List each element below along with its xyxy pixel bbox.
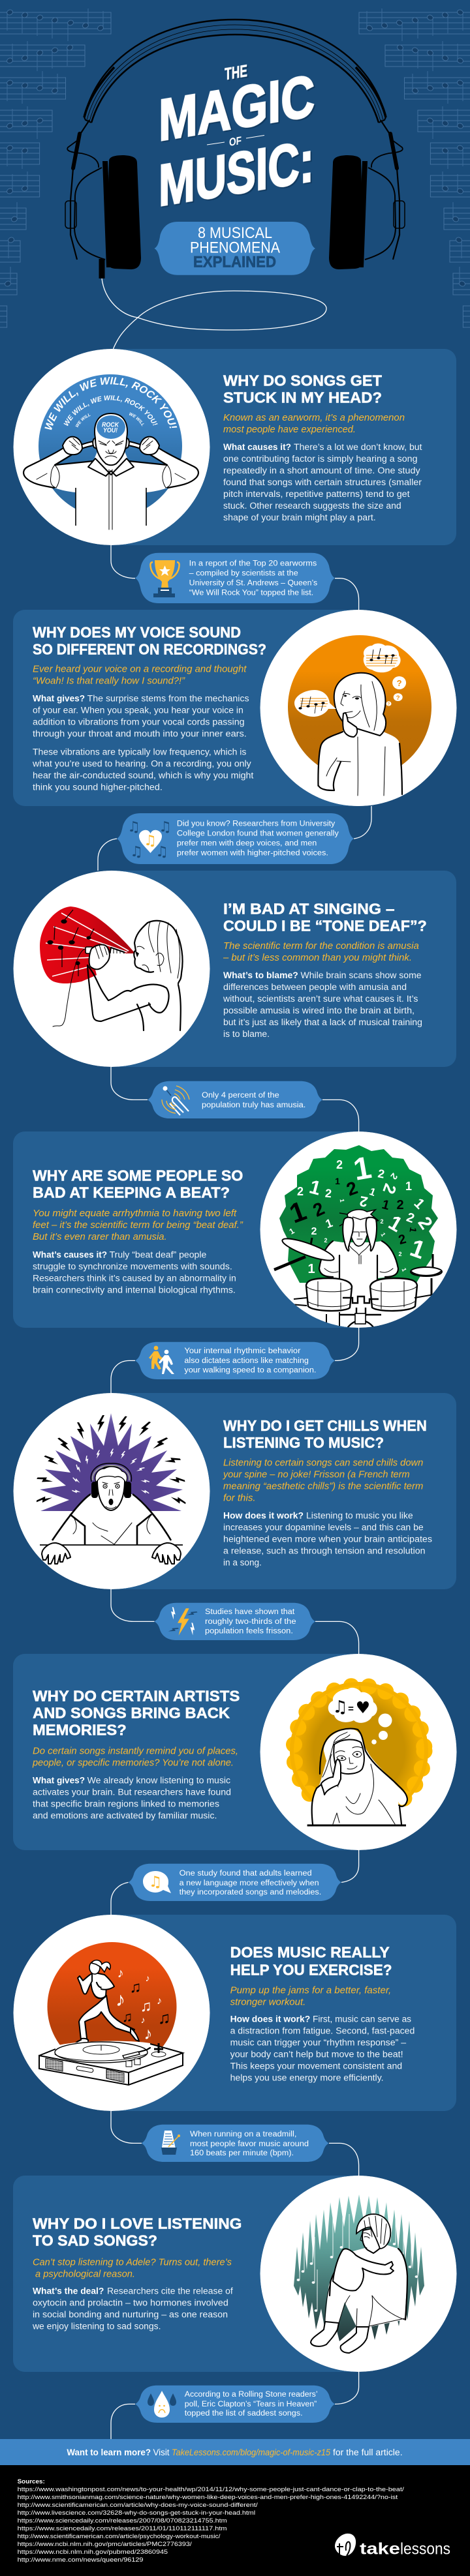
body text: of your ear. When you speak, you hear your voice in <box>33 705 243 715</box>
icon: heart with notes: ♫ <box>144 833 157 849</box>
illustration: woman remembering: = <box>348 1703 354 1715</box>
body text: There’s a lot we don’t know, but <box>294 442 422 452</box>
body text: First, music can serve as <box>313 2014 411 2024</box>
counting numbers: 1 <box>411 1195 428 1212</box>
counting numbers: 2 <box>324 1187 332 1200</box>
callout: language learning fact: they incorporated songs and melodies. <box>180 1889 321 1896</box>
body text: What gives? <box>33 693 85 703</box>
callout: amusia fact: population truly has amusia. <box>202 1101 306 1109</box>
body text: in a song. <box>223 1557 262 1567</box>
panel: stuck in my head <box>13 349 456 545</box>
sources strip: https://www.ncbi.nlm.nih.gov/pubmed/23860945 <box>18 2549 168 2555</box>
intro: But it’s even rarer than amusia. <box>33 1232 167 1242</box>
logo: takelessons: take <box>360 2540 400 2558</box>
intro <box>223 941 419 963</box>
body text: oxytocin and prolactin – two hormones involved <box>33 2298 228 2308</box>
illustration: man plugging his ears: WE WILL, WE WILL, ROCK YOU! <box>44 377 178 430</box>
heading <box>33 624 266 657</box>
counting numbers <box>289 1157 432 1273</box>
illustration: man plugging his ears: WE WILL, WE WILL, ROCK YOU! <box>64 395 158 427</box>
illustration: person singing into microphone <box>13 871 210 1067</box>
intro <box>223 413 405 435</box>
body text <box>32 693 254 792</box>
heading: COULD I BE “TONE DEAF”? <box>223 918 427 935</box>
body text: hear the air-conducted sound, which is why you might <box>33 770 254 780</box>
body text <box>33 1775 231 1820</box>
body text: These vibrations are typically low frequency, which is <box>33 747 247 756</box>
body text <box>223 1510 432 1567</box>
illustration: woman remembering <box>260 1654 457 1850</box>
body text <box>223 970 422 1039</box>
body text: helps you use energy more efficiently. <box>230 2073 384 2082</box>
icon: tuning fork <box>162 1086 189 1115</box>
intro <box>230 1986 391 2008</box>
title: THE <box>225 62 247 84</box>
body text: shape of your brain might play a part. <box>223 513 376 522</box>
body text: What’s causes it? <box>33 1250 107 1259</box>
body text: While brain scans show some <box>300 970 422 980</box>
sources strip: https://www.sciencedaily.com/releases/2007/08/070823214755.htm <box>18 2517 227 2524</box>
counting numbers: 2 <box>388 1171 400 1182</box>
music notes: ♫ <box>140 1998 152 2015</box>
sources strip: http://www.nme.com/news/queen/96129 <box>18 2556 143 2563</box>
callout: treadmill fact <box>142 2125 329 2162</box>
counting numbers: 1 <box>285 1195 310 1229</box>
intro <box>32 1746 238 1768</box>
callout: voice preference fact <box>117 813 354 864</box>
heading <box>223 1417 427 1451</box>
counting numbers: 1 <box>339 1199 345 1203</box>
body text: think you sound higher-pitched. <box>33 782 163 792</box>
panel: sad songs <box>13 2176 457 2372</box>
body text: We already know listening to music <box>87 1775 230 1785</box>
heading: WHY DO I GET CHILLS WHEN <box>223 1417 427 1434</box>
intro: Ever heard your voice on a recording and thought <box>33 665 247 675</box>
connector lines <box>98 545 371 2440</box>
subtitle banner <box>154 222 315 275</box>
icon: trophy <box>150 560 180 597</box>
callout: treadmill fact: When running on a treadmill, <box>190 2131 296 2138</box>
sources strip: https://www.washingtonpost.com/news/to-your-health/wp/2014/11/12/why-some-people-just-cant-dance-or-clap-to-the-beat/ <box>18 2486 404 2493</box>
counting numbers: 1 <box>405 1180 412 1193</box>
counting numbers: 1 <box>324 1216 334 1231</box>
callout: earworm fact <box>135 553 335 603</box>
footer call to action: Visit <box>153 2448 170 2457</box>
headphone cable <box>102 278 326 349</box>
heading: STUCK IN MY HEAD? <box>223 389 382 406</box>
music notes: ♪ <box>144 2024 153 2043</box>
callout: earworm fact: – compiled by scientists at the <box>189 570 298 578</box>
intro: Known as an earworm, it’s a phenomenon <box>223 413 405 423</box>
body text: Researchers think it’s caused by an abnormality in <box>33 1273 236 1283</box>
panel: voice on recordings <box>13 610 457 809</box>
title: OF <box>229 134 242 149</box>
title: MAGIC <box>159 63 315 154</box>
body text: a distraction from fatigue. Second, fast-paced <box>230 2026 415 2035</box>
panel: keeping a beat <box>13 1131 457 1330</box>
icon: heart with notes: ♫ <box>159 819 172 835</box>
intro: Do certain songs instantly remind you of places, <box>33 1746 238 1756</box>
sources strip: https://www.ncbi.nlm.nih.gov/pmc/articles/PMC2776393/ <box>18 2541 192 2547</box>
intro: “Woah! Is that really how I sound?!” <box>33 676 185 687</box>
counting numbers: 1 <box>381 1197 391 1213</box>
counting numbers: 2 <box>379 1181 401 1197</box>
body text: is to blame. <box>223 1029 270 1039</box>
footer call to action: for the full article. <box>333 2448 403 2457</box>
counting numbers: 2 <box>414 1213 437 1233</box>
title: MUSIC: <box>159 128 314 219</box>
body text: activates your brain. But researchers have found <box>33 1787 231 1797</box>
intro: most people have experienced. <box>223 425 356 435</box>
counting numbers: 2 <box>405 1210 416 1226</box>
counting numbers: 1 <box>407 1227 419 1233</box>
callout: frisson fact: Studies have shown that <box>205 1608 295 1616</box>
body text: but it’s just as likely that a lack of musical training <box>223 1017 422 1027</box>
intro: Listening to certain songs can send chills down <box>223 1458 423 1468</box>
heading: DOES MUSIC REALLY <box>230 1944 390 1961</box>
body text: Researchers cite the release of <box>107 2286 233 2296</box>
illustration: woman remembering: ♫ <box>332 1698 348 1717</box>
body text: What causes it? <box>223 442 291 452</box>
sources strip: https://www.sciencedaily.com/releases/2011/01/110112111117.htm <box>18 2525 227 2532</box>
heading: BAD AT KEEPING A BEAT? <box>33 1184 230 1201</box>
icon: speech bubble with note: ♫ <box>149 1874 162 1891</box>
subtitle banner: PHENOMENA <box>190 239 280 256</box>
intro: meaning “aesthetic chills”) is the scientific term <box>223 1481 423 1491</box>
heading: MEMORIES? <box>33 1722 127 1739</box>
body text <box>32 2286 233 2331</box>
illustration: man plugging his ears <box>13 349 210 545</box>
callout: earworm fact: In a report of the Top 20 earworms <box>189 560 317 568</box>
counting numbers: 2 <box>396 1198 404 1212</box>
sources strip: Sources: <box>18 2478 45 2485</box>
subtitle banner: EXPLAINED <box>193 253 276 271</box>
icon: heart with notes <box>127 819 172 860</box>
intro: for this. <box>223 1493 256 1503</box>
callout: language learning fact: One study found that adults learned <box>180 1870 312 1878</box>
footer call to action: TakeLessons.com/blog/magic-of-music-z15 <box>172 2448 330 2457</box>
icon: metronome <box>161 2131 180 2155</box>
counting numbers: 1 <box>351 1150 374 1188</box>
counting numbers: 2 <box>380 1218 384 1225</box>
heading: WHY DOES MY VOICE SOUND <box>33 624 241 641</box>
icon: heart with notes: ♫ <box>155 844 168 860</box>
sources strip: http://www.scientificamerican.com/article/why-does-my-voice-sound-different/ <box>18 2502 258 2508</box>
callout: saddest songs fact: According to a Rolling Stone readers’ <box>185 2391 318 2399</box>
body text: The surprise stems from the mechanics <box>87 693 249 703</box>
body text: music can trigger your “rhythm response” – <box>230 2037 407 2047</box>
body text: possible amusia is wired into the brain at birth, <box>223 1006 415 1015</box>
body text: one contributing factor is simply hearing a song <box>223 454 418 464</box>
heading <box>230 1944 392 1978</box>
heading <box>33 1688 240 1739</box>
body text: What gives? <box>33 1775 85 1785</box>
body text: without, scientists aren’t sure what causes it. It’s <box>223 994 418 1004</box>
callout: rhythm fact <box>135 1342 335 1379</box>
counting numbers: 1 <box>307 1262 315 1276</box>
body text: repeatedly in a short amount of time. One study <box>223 466 420 475</box>
callout: saddest songs fact: topped the list of saddest songs. <box>185 2410 303 2418</box>
counting numbers: 2 <box>398 1251 402 1257</box>
body text: what you’re used to hearing. On a recording, you only <box>32 758 251 768</box>
callout: language learning fact: a new language more effectively when <box>180 1880 319 1887</box>
callout: amusia fact: Only 4 percent of the <box>202 1092 279 1100</box>
heading: LISTENING TO MUSIC? <box>223 1434 384 1451</box>
body text: What’s to blame? <box>223 970 298 980</box>
body text: your body can’t help but move to the beat! <box>230 2049 403 2059</box>
background music staves <box>0 8 470 327</box>
counting numbers: 2 <box>344 1177 360 1200</box>
intro: stronger workout. <box>230 1998 306 2008</box>
illustration: frustrated drummer <box>260 1131 457 1330</box>
logo: takelessons <box>335 2534 450 2558</box>
music notes: ♪ <box>145 1973 150 1983</box>
sources strip: http://www.smithsonianmag.com/science-nature/why-women-like-deep-voices-and-men-prefer-high-ones-41492244/?no-ist <box>18 2494 398 2500</box>
body text: pitch intervals, repetitive patterns) tend to get <box>223 489 410 499</box>
counting numbers: 2 <box>358 1193 369 1210</box>
icon: lightning bolts <box>168 1607 197 1636</box>
counting numbers: 1 <box>288 1226 296 1236</box>
music notes: ♪ <box>118 1966 124 1981</box>
panel: exercise <box>13 1915 456 2111</box>
callout: voice preference fact: College London found that women generally <box>177 830 339 838</box>
callout: treadmill fact: 160 beats per minute (bpm). <box>190 2149 294 2157</box>
illustration: man plugging his ears: WE WILL <box>129 412 144 427</box>
counting numbers: 2 <box>324 1237 328 1244</box>
body text: brain connectivity and internal biological rhythms. <box>33 1285 236 1295</box>
illustration: man plugging his ears: ROCK <box>102 421 119 429</box>
counting numbers: 1 <box>335 1176 340 1186</box>
icon: heart with notes: ♫ <box>130 844 143 860</box>
icon: speech bubble with note <box>143 1871 171 1893</box>
icon: two walkers <box>149 1346 174 1374</box>
title <box>159 62 315 219</box>
intro <box>223 1458 423 1503</box>
intro: – but it’s less common than you might think. <box>223 953 412 963</box>
subtitle banner: 8 MUSICAL <box>198 224 272 242</box>
counting numbers: 1 <box>379 1231 387 1238</box>
music notes: ♪ <box>141 2014 145 2025</box>
body text: and emotions are activated by familiar music. <box>33 1810 217 1820</box>
logo: takelessons: lessons <box>400 2540 450 2558</box>
intro <box>33 2257 232 2279</box>
counting numbers: 2 <box>297 1185 304 1198</box>
callout: treadmill fact: most people favor music around <box>190 2140 309 2148</box>
body text: struggle to synchronize movements with sounds. <box>33 1261 232 1271</box>
callout: voice preference fact: prefer men with deep voices, and men <box>177 840 317 848</box>
music notes: ♪ <box>116 1989 125 2011</box>
intro: people, or specific memories? You’re not alone. <box>32 1758 234 1768</box>
body text: we enjoy listening to sad songs. <box>32 2322 161 2331</box>
body text: How does it work? <box>223 1510 304 1520</box>
counting numbers: 1 <box>384 1210 407 1236</box>
callout: rhythm fact: your walking speed to a companion. <box>184 1366 316 1374</box>
callout: voice preference fact: prefer women with higher-pitched voices. <box>177 850 328 858</box>
heading: WHY DO I LOVE LISTENING <box>33 2215 242 2232</box>
callout: frisson fact: population feels frisson. <box>205 1627 293 1635</box>
counting numbers: 1 <box>400 1267 408 1272</box>
intro: The scientific term for the condition is amusia <box>223 941 419 951</box>
callout: earworm fact: “We Will Rock You” topped the list. <box>189 590 313 597</box>
music notes: ♫ <box>158 2008 170 2028</box>
counting numbers: 2 <box>336 1158 343 1171</box>
callout: language learning fact <box>128 1864 341 1901</box>
intro: feet – it’s the scientific term for being “beat deaf.” <box>33 1220 243 1231</box>
callout: voice preference fact: Did you know? Researchers from University <box>177 820 336 828</box>
callout: saddest songs fact <box>135 2386 335 2423</box>
body text <box>223 442 422 522</box>
heading: WHY ARE SOME PEOPLE SO <box>33 1167 243 1184</box>
illustration: sad listener <box>260 2176 457 2372</box>
illustration: runner on a turntable <box>13 1915 210 2111</box>
heading <box>33 1167 243 1201</box>
illustration: person hearing own voice: ? <box>396 695 400 702</box>
illustration: listener with chills <box>13 1393 210 1589</box>
body text: heightened even more when your brain anticipates <box>223 1534 432 1544</box>
counting numbers: 1 <box>307 1176 323 1200</box>
body text <box>33 1250 236 1295</box>
heading <box>223 901 427 935</box>
footer call to action: Want to learn more? <box>67 2448 151 2457</box>
illustration: man plugging his ears: YOU! <box>103 427 118 434</box>
intro <box>33 665 247 687</box>
body text: a release, such as through tension and resolution <box>223 1546 426 1555</box>
illustration: person hearing own voice: ? <box>397 678 402 688</box>
sources strip <box>0 2465 470 2576</box>
callout: rhythm fact: also dictates actions like matching <box>184 1357 309 1365</box>
callout: saddest songs fact: poll, Eric Clapton’s “Tears in Heaven” <box>185 2401 317 2408</box>
heading: TO SAD SONGS? <box>33 2232 157 2249</box>
icon: sad teardrop <box>148 2391 176 2418</box>
sources strip: http://www.livescience.com/32628-why-do-songs-get-stuck-in-your-head.html <box>18 2509 255 2516</box>
callout: amusia fact <box>148 1081 322 1118</box>
intro: Can’t stop listening to Adele? Turns out, there’s <box>33 2257 232 2268</box>
counting numbers: 2 <box>310 1198 328 1221</box>
heading: WHY DO SONGS GET <box>223 372 382 389</box>
footer call to action <box>0 2439 470 2465</box>
callout: rhythm fact: Your internal rhythmic behavior <box>184 1347 301 1355</box>
headphones <box>65 20 405 278</box>
callout: frisson fact <box>154 1603 315 1640</box>
intro: a psychological reason. <box>35 2269 135 2279</box>
body text: through your throat and mouth into your inner ears. <box>33 728 247 738</box>
illustration: woman remembering: ♥ <box>356 1698 370 1717</box>
body text: increases your dopamine levels – and this can be <box>223 1522 424 1532</box>
body text: found that songs with certain structures (smaller <box>223 477 422 487</box>
intro: You might equate arrhythmia to having two left <box>33 1208 237 1219</box>
body text: addition to vibrations from your vocal cords passing <box>33 717 245 726</box>
body text: stuck. Other research suggests the size and <box>223 501 401 511</box>
music notes: ♫ <box>129 1979 141 1996</box>
illustration: person hearing own voice: ? <box>388 703 390 707</box>
body text: Listening to music you like <box>306 1510 413 1520</box>
music notes: ♪ <box>157 1996 162 2007</box>
heading: SO DIFFERENT ON RECORDINGS? <box>33 640 266 657</box>
body text: What’s the deal? <box>33 2286 104 2296</box>
callout: frisson fact: roughly two-thirds of the <box>205 1618 296 1626</box>
body text: This keeps your movement consistent and <box>230 2061 402 2071</box>
body text <box>230 2014 415 2082</box>
heading: WHY DO CERTAIN ARTISTS <box>33 1688 240 1705</box>
intro: Pump up the jams for a better, faster, <box>230 1986 391 1996</box>
heading: I’M BAD AT SINGING – <box>223 901 395 918</box>
heading <box>33 2215 242 2249</box>
icon: heart with notes: ♫ <box>127 819 140 835</box>
counting numbers: 1 <box>368 1186 377 1199</box>
counting numbers: 1 <box>407 1235 429 1265</box>
body text: differences between people with amusia and <box>223 982 407 992</box>
lightning bolts around the burst <box>37 1415 186 1504</box>
heading: HELP YOU EXERCISE? <box>230 1961 392 1978</box>
sources strip: http://www.scientificamerican.com/article/psychology-workout-music/ <box>18 2533 221 2539</box>
counting numbers: 2 <box>377 1167 386 1181</box>
music notes <box>118 1969 168 2039</box>
panel: chills <box>13 1393 456 1589</box>
music notes: ♫ <box>122 2009 133 2025</box>
intro: your spine – no joke! Frisson (a French term <box>223 1469 410 1480</box>
illustration: person hearing own voice <box>260 610 457 809</box>
body text: How does it work? <box>230 2014 310 2024</box>
heading: AND SONGS BRING BACK <box>33 1704 230 1721</box>
intro <box>33 1208 243 1242</box>
panel: memories <box>13 1654 457 1850</box>
body text: in social bonding and nurturing – as one reason <box>33 2310 228 2320</box>
illustration: man plugging his ears: WE WILL <box>75 413 91 428</box>
heading <box>223 372 382 406</box>
callout: earworm fact: University of St. Andrews – Queen’s <box>189 580 317 588</box>
counting numbers: 2 <box>397 1232 407 1248</box>
body text: that specific brain regions linked to memories <box>33 1799 219 1808</box>
counting numbers: 2 <box>311 1226 317 1237</box>
body text: Truly “beat deaf” people <box>110 1250 206 1259</box>
panel: tone deaf <box>13 871 456 1067</box>
